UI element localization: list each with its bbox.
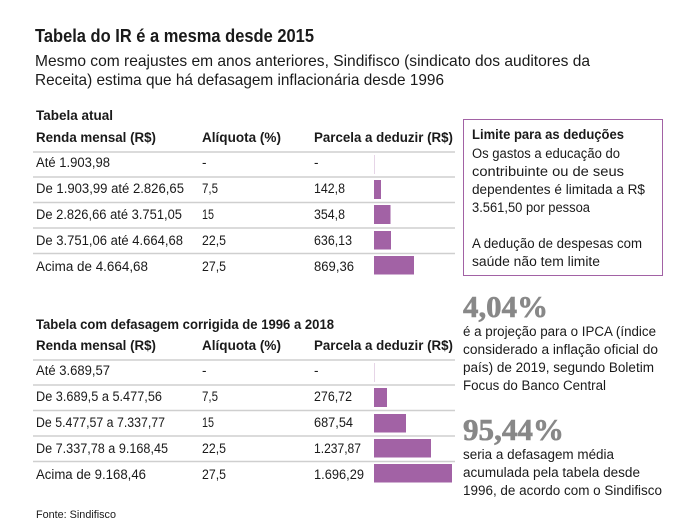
row 3	[36, 414, 406, 432]
row 4	[36, 439, 431, 458]
table heading: Tabela atual	[36, 108, 113, 123]
row 1: -	[202, 363, 206, 378]
callout text: 3.561,50 por pessoa	[472, 200, 590, 215]
row 1: Até 3.689,57	[36, 363, 110, 378]
row 5	[36, 256, 414, 274]
table heading: Tabela com defasagem corrigida de 1996 a 2018	[36, 317, 334, 332]
subtitle	[35, 53, 590, 89]
row 2: 142,8	[314, 181, 345, 196]
row 4	[36, 231, 391, 250]
big number: 4,04%	[463, 289, 548, 324]
callout: limite para as deduções	[464, 120, 662, 276]
subtitle: Receita) estima que há defasagem inflacionária desde 1996	[35, 72, 444, 89]
row 5: Acima de 9.168,46	[36, 467, 146, 482]
stat description: país) de 2019, segundo Boletim	[463, 360, 654, 375]
row 4: 22,5	[202, 233, 226, 248]
row 4: 636,13	[314, 233, 352, 248]
row 3: De 2.826,66 até 3.751,05	[36, 207, 182, 222]
title: Tabela do IR é a mesma desde 2015	[35, 26, 314, 46]
row 1	[36, 155, 375, 174]
row 4: 1.237,87	[314, 441, 361, 456]
column headers	[36, 338, 453, 353]
panel: tabela atual	[33, 108, 455, 274]
column headers: Parcela a deduzir (R$)	[314, 130, 453, 145]
row 2: De 3.689,5 a 5.477,56	[36, 389, 162, 404]
stat description: acumulada pela tabela desde	[463, 465, 640, 480]
row 2: 7,5	[202, 389, 218, 404]
row 5: 27,5	[202, 259, 226, 274]
stat: 95,44%	[463, 412, 662, 498]
panel: tabela corrigida	[33, 317, 455, 482]
callout text: A dedução de despesas com	[472, 236, 642, 251]
column headers: Parcela a deduzir (R$)	[314, 338, 453, 353]
callout text: Os gastos a educação do	[472, 146, 620, 161]
callout text: dependentes é limitada a R$	[472, 182, 645, 197]
column headers	[36, 130, 453, 145]
row 2: 7,5	[202, 181, 218, 196]
stat description: considerado a inflação oficial do	[463, 342, 658, 357]
column headers: Renda mensal (R$)	[36, 338, 156, 353]
source note: Fonte: Sindifisco	[36, 509, 116, 521]
row 5: 869,36	[314, 259, 354, 274]
row 3: De 5.477,57 a 7.337,77	[36, 415, 165, 430]
callout text	[472, 146, 645, 269]
row 5: 1.696,29	[314, 467, 364, 482]
row 5: 27,5	[202, 467, 226, 482]
stat description: é a projeção para o IPCA (índice	[463, 324, 656, 339]
row 3: 354,8	[314, 207, 345, 222]
row 3: 15	[202, 207, 214, 222]
row 4: De 3.751,06 até 4.664,68	[36, 233, 183, 248]
stat description: Focus do Banco Central	[463, 378, 606, 393]
column headers: Alíquota (%)	[202, 338, 281, 353]
row 5: Acima de 4.664,68	[36, 259, 148, 274]
subtitle: Mesmo com reajustes em anos anteriores, Sindifisco (sindicato dos auditores da	[35, 53, 590, 70]
column headers: Alíquota (%)	[202, 130, 281, 145]
row 1: Até 1.903,98	[36, 155, 110, 170]
stat: 4,04%	[463, 289, 658, 393]
header	[35, 26, 590, 89]
callout text: contribuinte ou de seus	[472, 164, 624, 179]
row 2: De 1.903,99 até 2.826,65	[36, 181, 184, 196]
callout heading: Limite para as deduções	[472, 127, 624, 142]
stat description	[463, 324, 658, 393]
stat description: seria a defasagem média	[463, 447, 614, 462]
row 3	[36, 205, 390, 224]
row 3: 15	[202, 415, 214, 430]
row 2: 276,72	[314, 389, 352, 404]
stat description	[463, 447, 662, 498]
row 1	[36, 363, 375, 382]
row 3: 687,54	[314, 415, 353, 430]
row 4: 22,5	[202, 441, 226, 456]
row 1: -	[314, 155, 318, 170]
stat description: 1996, de acordo com o Sindifisco	[463, 483, 662, 498]
row 1: -	[202, 155, 206, 170]
callout text: saúde não tem limite	[472, 254, 600, 269]
row 4: De 7.337,78 a 9.168,45	[36, 441, 168, 456]
row 5	[36, 464, 452, 482]
column headers: Renda mensal (R$)	[36, 130, 156, 145]
big number: 95,44%	[463, 412, 564, 447]
row 1: -	[314, 363, 318, 378]
row 2	[36, 180, 381, 199]
row 2	[36, 388, 387, 407]
